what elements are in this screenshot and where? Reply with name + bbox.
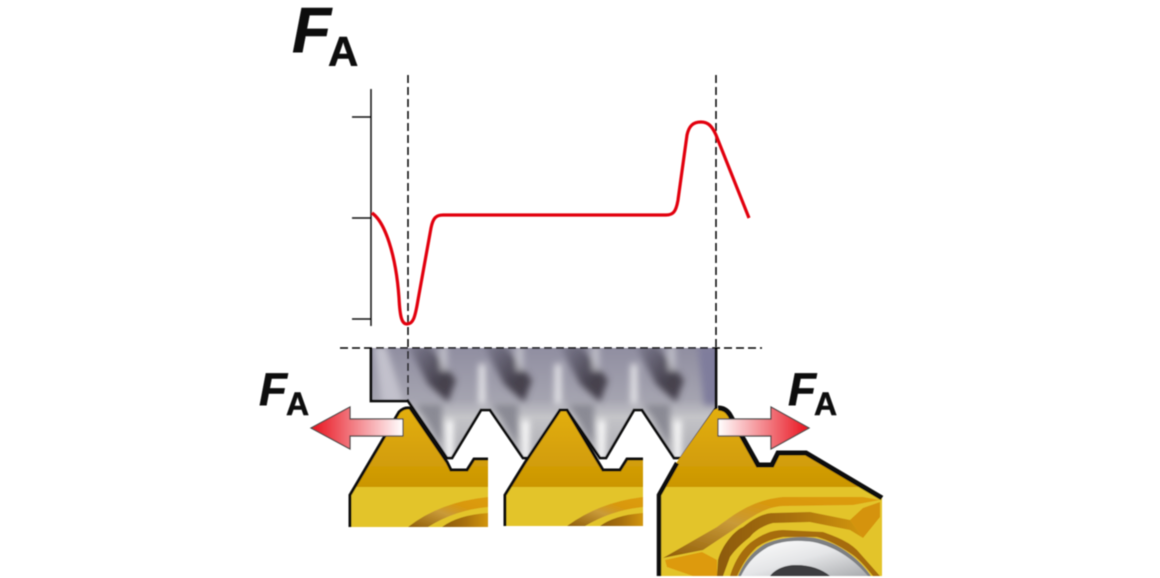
label: left FA bbox=[259, 363, 309, 422]
label: left FA: A bbox=[286, 386, 309, 422]
arrow: left force bbox=[311, 407, 403, 449]
cutting insert left bbox=[345, 405, 495, 527]
label: right FA: A bbox=[814, 386, 837, 422]
label: left FA: F bbox=[259, 363, 289, 415]
label: right FA: F bbox=[788, 363, 818, 415]
dashed reference lines bbox=[340, 75, 762, 400]
diagram: axial thread force bbox=[258, 6, 884, 577]
chart axis bbox=[352, 89, 371, 326]
heading: FA bbox=[292, 0, 358, 75]
steel thread workpiece bbox=[365, 345, 725, 465]
arrow: right force bbox=[718, 407, 809, 449]
cutting insert middle bbox=[500, 405, 650, 526]
heading: FA: A bbox=[328, 28, 358, 75]
label: right FA bbox=[788, 363, 837, 422]
cutting insert right bbox=[650, 405, 885, 576]
force curve bbox=[372, 122, 749, 324]
